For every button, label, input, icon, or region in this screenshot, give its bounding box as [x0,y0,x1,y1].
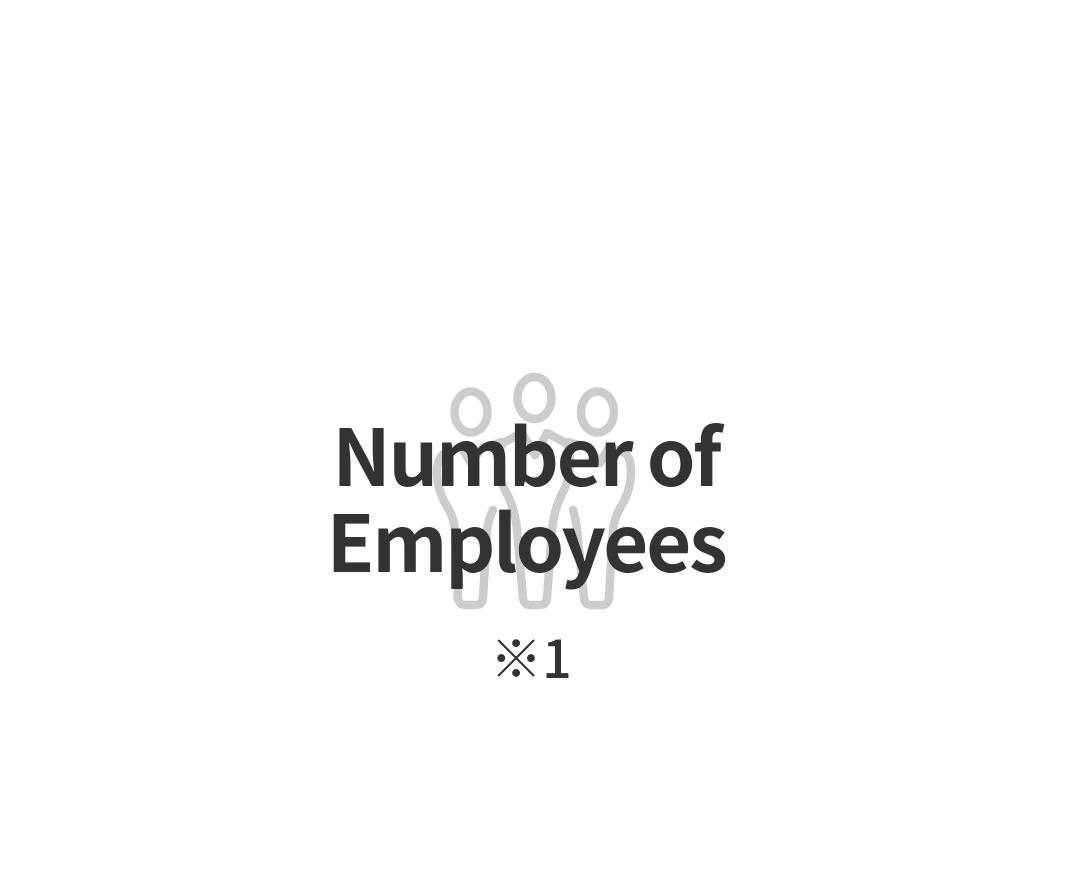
title: Number of [332,397,720,509]
title: Employees [327,483,725,595]
footnote mark: ※1 [490,618,572,693]
title [327,397,726,595]
